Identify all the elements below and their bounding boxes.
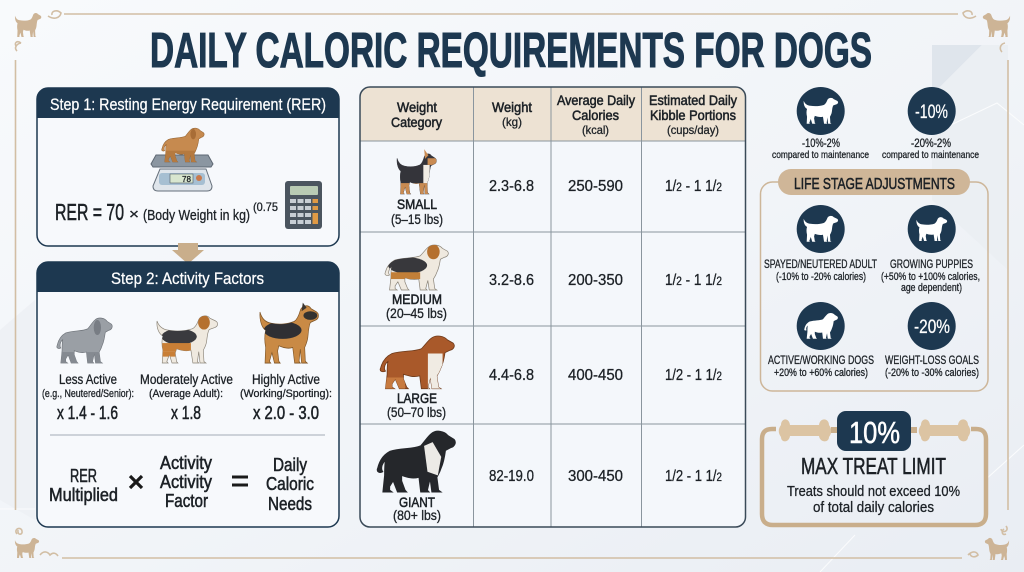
formula [55,199,278,225]
item: weight loss goals: -20% [914,317,950,338]
equation [49,453,314,514]
activity label: highly active: (Working/Sporting): [240,388,332,400]
row: giant [377,431,722,523]
step 2 heading: Step 2: Activity Factors [111,269,264,288]
header labels: Weight [492,99,532,115]
activity label: less active: (e.g., Neutered/Senior): [42,388,134,400]
header labels: (kg) [502,115,522,129]
equation: Needs [268,494,312,514]
icon: corner dog top left [15,13,41,37]
row: large: 1/2 - 1 1/2 [665,367,722,384]
formula: RER = 70 [55,199,124,225]
header labels: (cups/day) [667,123,719,137]
panel: life stage adjustments [760,169,988,391]
activity label: highly active: Highly Active [252,372,320,387]
life stage heading [778,169,970,195]
item: spayed neutered adult [764,205,877,283]
row: large [380,336,722,420]
activity label: highly active [240,372,332,423]
item: weight loss goals: (-20% to -30% calories) [885,367,979,379]
equation: Multiplied [49,485,118,505]
icon: beagle [157,315,218,363]
row: medium: (20–45 lbs) [386,306,447,321]
activity label: less active: Less Active [59,372,117,387]
row: medium: 3.2-8.6 [489,272,534,289]
row: small: SMALL [397,196,437,212]
row: giant: 1/2 - 1 1/2 [665,468,722,485]
row: small: 1/2 - 1 1/2 [665,178,722,195]
row: medium: 1/2 - 1 1/2 [665,272,722,289]
formula: (Body Weight in kg) [143,207,250,224]
item: growing puppies: (+50% to +100% calories, [881,271,980,283]
panel: calorie table [360,87,746,527]
formula: × [129,206,139,223]
stat: minus 10 percent [882,87,979,161]
activity label: less active: x 1.4 - 1.6 [57,403,118,423]
step 2 header [37,262,339,292]
equation: Daily [273,455,307,475]
item: active working dogs: +20% to +60% calories) [774,367,868,379]
header labels: Average Daily [557,92,635,108]
table header row [360,87,746,141]
row: large: 4.4-6.8 [489,367,534,384]
stat: dog icon maintenance: compared to maintenance [772,149,869,161]
icon: calculator [285,181,322,229]
item: spayed neutered adult: (-10% to -20% calories) [776,271,866,283]
row: large: LARGE [397,390,437,406]
activity label: moderately active: x 1.8 [171,403,201,423]
row: small: (5–15 lbs) [391,212,443,227]
row: small [391,149,722,227]
icon: corner dog top right [983,13,1010,37]
equation: Activity [160,453,212,473]
row: medium: MEDIUM [392,291,442,307]
activity label: moderately active: Moderately Active [140,372,233,387]
stat: dog icon maintenance [772,87,869,161]
icon: left bone [779,419,837,441]
item: growing puppies [881,205,980,294]
equation: RER [70,466,97,486]
formula: (0.75 [253,200,278,214]
header labels: Category [391,114,442,130]
stat: minus 10 percent: -10% [915,102,948,123]
item: active working dogs [768,302,874,379]
row: large: 400-450 [568,367,623,384]
stat: dog icon maintenance: -10%-2% [802,138,840,150]
item: weight loss goals [885,302,979,379]
equation: Caloric [266,474,314,494]
panel: step 2 [37,262,339,527]
treat heading: MAX TREAT LIMIT [801,453,946,479]
row: small: 2.3-6.8 [489,178,534,195]
panel: step 1 [37,88,339,246]
activity label: highly active: x 2.0 - 3.0 [253,403,319,423]
row: small: 250-590 [568,178,623,195]
icon: corner dog bottom left [15,538,39,558]
treat badge: 10% [849,415,900,450]
header labels: Kibble Portions [650,107,736,123]
item: weight loss goals: WEIGHT-LOSS GOALS [885,353,979,367]
equation: Activity [160,472,212,492]
life stage heading: LIFE STAGE ADJUSTMENTS [794,176,955,193]
header labels: Weight [397,99,437,115]
stat: minus 10 percent: -20%-2% [911,138,951,150]
header labels: (kcal) [582,123,609,137]
stat: minus 10 percent: compared to maintenance [882,149,979,161]
item: growing puppies: age dependent) [901,282,962,294]
equation: Factor [165,491,208,511]
icon: dog on scale: 78 [182,175,192,184]
row: giant: 300-450 [568,468,623,485]
panel: max treat limit [762,411,986,525]
step 1 header [37,88,339,118]
row: giant: 82-19.0 [489,468,534,485]
icon: corner dog bottom right [985,538,1009,560]
header labels [391,92,737,137]
item: active working dogs: ACTIVE/WORKING DOGS [768,353,874,367]
header labels: Estimated Daily [649,92,737,108]
row: medium [385,244,722,321]
treat description: Treats should not exceed 10% [787,483,960,500]
icon: german shepherd [260,303,318,363]
step 1 heading: Step 1: Resting Energy Requirement (RER) [50,95,326,114]
icon: right bone [911,419,970,441]
row: large: (50–70 lbs) [387,405,446,420]
icon: grey dog [57,318,112,364]
header labels: Calories [572,107,619,123]
row: giant: (80+ lbs) [393,508,441,523]
treat description [787,483,960,516]
item: spayed neutered adult: SPAYED/NEUTERED ADULT [764,257,877,271]
activity label: moderately active: (Average Adult): [149,388,223,400]
icon: dog on scale [151,128,213,191]
row: medium: 200-350 [568,272,623,289]
treat description: of total daily calories [813,499,934,516]
row: giant: GIANT [399,494,435,510]
arrow: step 1 to step 2 [172,243,204,264]
activity label: moderately active [140,372,233,423]
activity label: less active [42,372,134,423]
item: growing puppies: GROWING PUPPIES [890,257,973,271]
